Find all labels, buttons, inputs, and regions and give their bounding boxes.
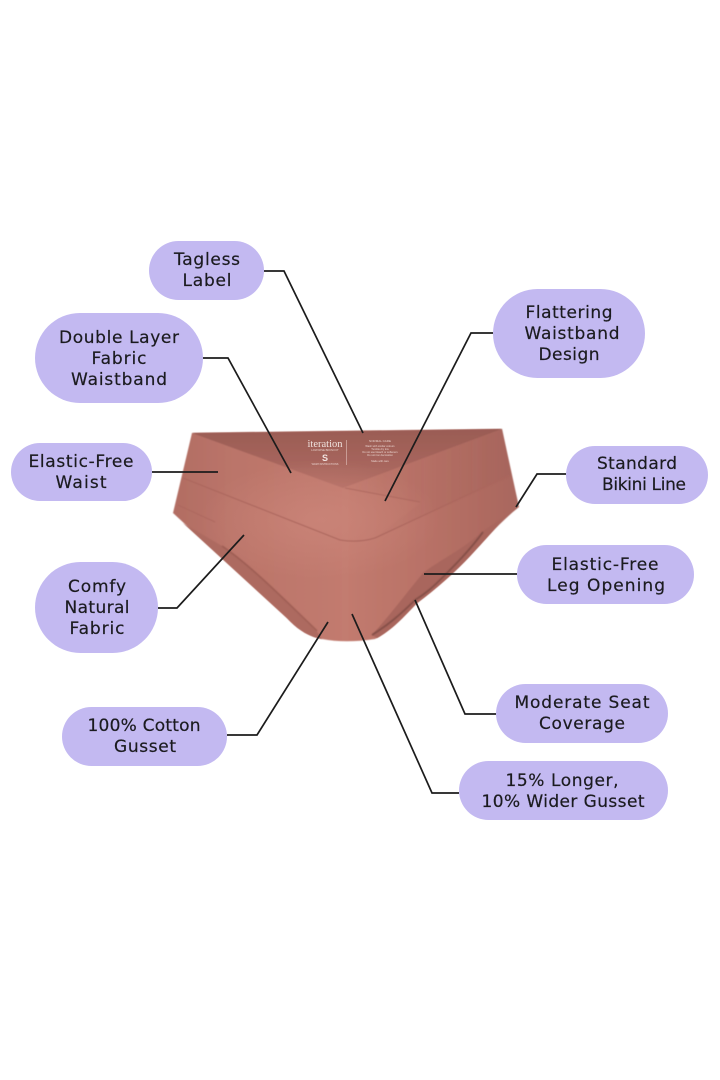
callout: 15% Longer, 10% Wider Gusset: 15% Longer, xyxy=(506,771,618,791)
garment: inner back waistband xyxy=(192,429,502,488)
garment: printed label: S xyxy=(322,453,328,463)
callout: Elastic-Free Leg Opening: Elastic-Free xyxy=(552,555,658,575)
garment: right band shade xyxy=(343,429,511,538)
callout: Elastic-Free Leg Opening xyxy=(424,545,694,604)
callout: Moderate Seat Coverage: Coverage xyxy=(539,714,625,734)
callout: Standard Bikini Line xyxy=(516,446,708,507)
garment: printed label: LOW RISE BIKINI FIT xyxy=(311,448,339,452)
callout: Moderate Seat Coverage xyxy=(415,600,668,743)
garment: printed label: iteration xyxy=(308,439,343,450)
callout: Standard Bikini Line: Standard xyxy=(597,454,677,474)
callout: Elastic-Free Leg Opening: Leg Opening xyxy=(547,576,665,596)
garment: left leg strip xyxy=(183,523,322,639)
garment: overlap fold xyxy=(345,488,420,502)
garment: right leg strip xyxy=(372,516,505,638)
callout: Flattering Waistband Design: Waistband xyxy=(524,324,620,344)
callout: Double Layer Fabric Waistband: Fabric xyxy=(92,349,146,369)
garment: printed label: Do not use bleach or softeners xyxy=(362,450,398,454)
garment: lower band seam xyxy=(178,505,215,522)
garment: waistband seam xyxy=(183,475,510,541)
garment: main body xyxy=(173,429,519,641)
garment: printed label: Do not iron decoration xyxy=(367,453,393,457)
garment: underwear illustration xyxy=(173,429,519,641)
callout: Elastic-Free Waist: Waist xyxy=(56,473,107,493)
callout: 100% Cotton Gusset: Gusset xyxy=(114,737,176,757)
callout: Standard Bikini Line: Bikini Line xyxy=(602,475,686,495)
callout: Comfy Natural Fabric: Fabric xyxy=(70,619,124,639)
callout: Elastic-Free Waist: Elastic-Free xyxy=(28,452,134,472)
callout: 15% Longer, 10% Wider Gusset: 10% Wider Gusset xyxy=(482,792,645,812)
callout: 100% Cotton Gusset: 100% Cotton xyxy=(88,716,200,736)
garment: left leg hem xyxy=(222,546,317,631)
garment: printed label: WASH INSTRUCTIONS xyxy=(312,463,339,466)
garment: printed label: Wash with similar colours xyxy=(365,444,395,448)
callout: Tagless Label: Label xyxy=(182,271,232,291)
garment: centre highlight xyxy=(200,460,440,580)
callout: Flattering Waistband Design: Flattering xyxy=(526,303,612,323)
callout: 15% Longer, 10% Wider Gusset xyxy=(352,614,668,820)
garment: printed label: Made with care xyxy=(371,459,389,463)
callout: Flattering Waistband Design xyxy=(385,289,645,501)
callout: Double Layer Fabric Waistband: Waistband xyxy=(71,370,167,390)
garment: printed label: Tumble dry low xyxy=(371,447,389,451)
callout: Flattering Waistband Design: Design xyxy=(538,345,600,365)
callout: Double Layer Fabric Waistband: Double Layer xyxy=(59,328,179,348)
callout: 100% Cotton Gusset xyxy=(62,622,328,766)
callout: Comfy Natural Fabric: Comfy xyxy=(68,577,126,597)
callout: Moderate Seat Coverage: Moderate Seat xyxy=(514,693,650,713)
callout: Comfy Natural Fabric xyxy=(35,535,244,653)
garment: printed label: NORMAL CARE xyxy=(369,439,391,443)
callout: Double Layer Fabric Waistband xyxy=(35,313,291,473)
callout: Elastic-Free Waist xyxy=(11,443,218,501)
callout: Tagless Label: Tagless xyxy=(173,250,240,270)
garment: right leg hem xyxy=(372,532,483,635)
callout: Comfy Natural Fabric: Natural xyxy=(64,598,130,618)
callout: Tagless Label xyxy=(149,241,363,433)
garment: printed label xyxy=(308,439,398,466)
